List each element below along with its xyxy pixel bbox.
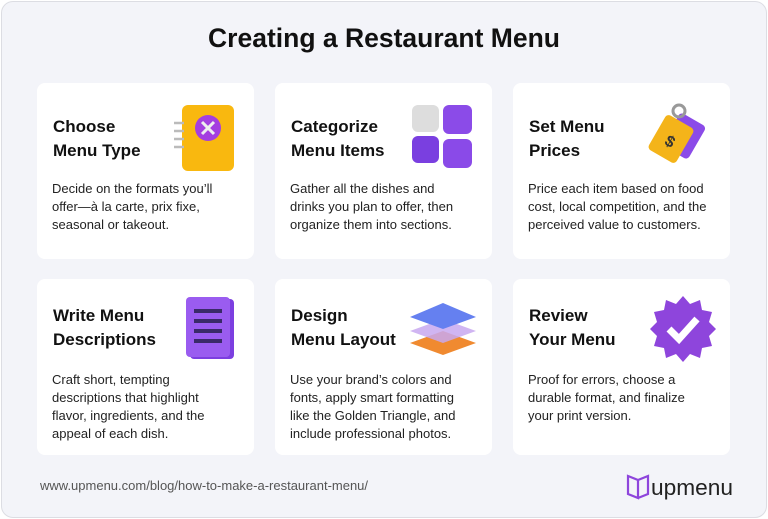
icon: price tag: $	[662, 133, 678, 152]
panel: choose menu type: Decide on the formats you’ll	[52, 181, 212, 196]
panel: review: Your Menu	[529, 330, 616, 349]
panel: review	[513, 279, 730, 455]
panel: categorize: Gather all the dishes and	[290, 181, 435, 196]
icon: layers	[410, 303, 476, 355]
panel: review: Review	[529, 306, 588, 325]
title: Creating a Restaurant Menu	[208, 23, 560, 53]
icon: price tag	[648, 104, 705, 163]
panel: prices: cost, local competition, and the	[528, 199, 706, 214]
panel: descriptions: Write Menu	[53, 306, 144, 325]
panel: descriptions: appeal of each dish.	[52, 426, 168, 441]
logo: upmenu	[651, 475, 733, 500]
panel: choose menu type: Menu Type	[53, 141, 141, 160]
panel: layout: Use your brand’s colors and	[290, 372, 452, 387]
footer url: www.upmenu.com/blog/how-to-make-a-restaurant-menu/	[40, 478, 368, 493]
panel: choose menu type: offer—à la carte, prix fixe,	[52, 199, 200, 214]
panel: descriptions	[37, 279, 254, 455]
panel: layout: Design	[291, 306, 348, 325]
icon: check badge	[650, 296, 716, 362]
panel: prices: Set Menu	[529, 117, 605, 136]
panel: layout: like the Golden Triangle, and	[290, 408, 456, 423]
panel: categorize	[275, 83, 492, 259]
panel: prices: Prices	[529, 141, 580, 160]
panel: choose menu type: seasonal or takeout.	[52, 217, 169, 232]
icon: blocks	[412, 105, 472, 168]
panel: layout: include professional photos.	[290, 426, 451, 441]
icon: document	[186, 297, 234, 359]
panel: prices: Price each item based on food	[528, 181, 704, 196]
panel: descriptions: flavor, ingredients, and the	[52, 408, 204, 423]
panel: choose menu type: Choose	[53, 117, 115, 136]
panel: layout: Menu Layout	[291, 330, 396, 349]
panel: choose menu type	[37, 83, 254, 259]
panel: categorize: drinks you plan to offer, then	[290, 199, 453, 214]
panel: descriptions: Craft short, tempting	[52, 372, 170, 387]
panel: categorize: organize them into sections.	[290, 217, 452, 232]
panel: layout: fonts, apply smart formatting	[290, 390, 454, 405]
panel: prices: perceived value to customers.	[528, 217, 701, 232]
panel: review: durable format, and finalize	[528, 390, 685, 405]
panel: review: Proof for errors, choose a	[528, 372, 675, 387]
panel: descriptions: descriptions that highlight	[52, 390, 199, 405]
panel: categorize: Categorize	[291, 117, 378, 136]
panel: prices	[513, 83, 730, 259]
panel: layout	[275, 279, 492, 455]
panel: categorize: Menu Items	[291, 141, 385, 160]
panel: review: your print version.	[528, 408, 631, 423]
panel: descriptions: Descriptions	[53, 330, 156, 349]
icon: menu book	[174, 105, 234, 171]
